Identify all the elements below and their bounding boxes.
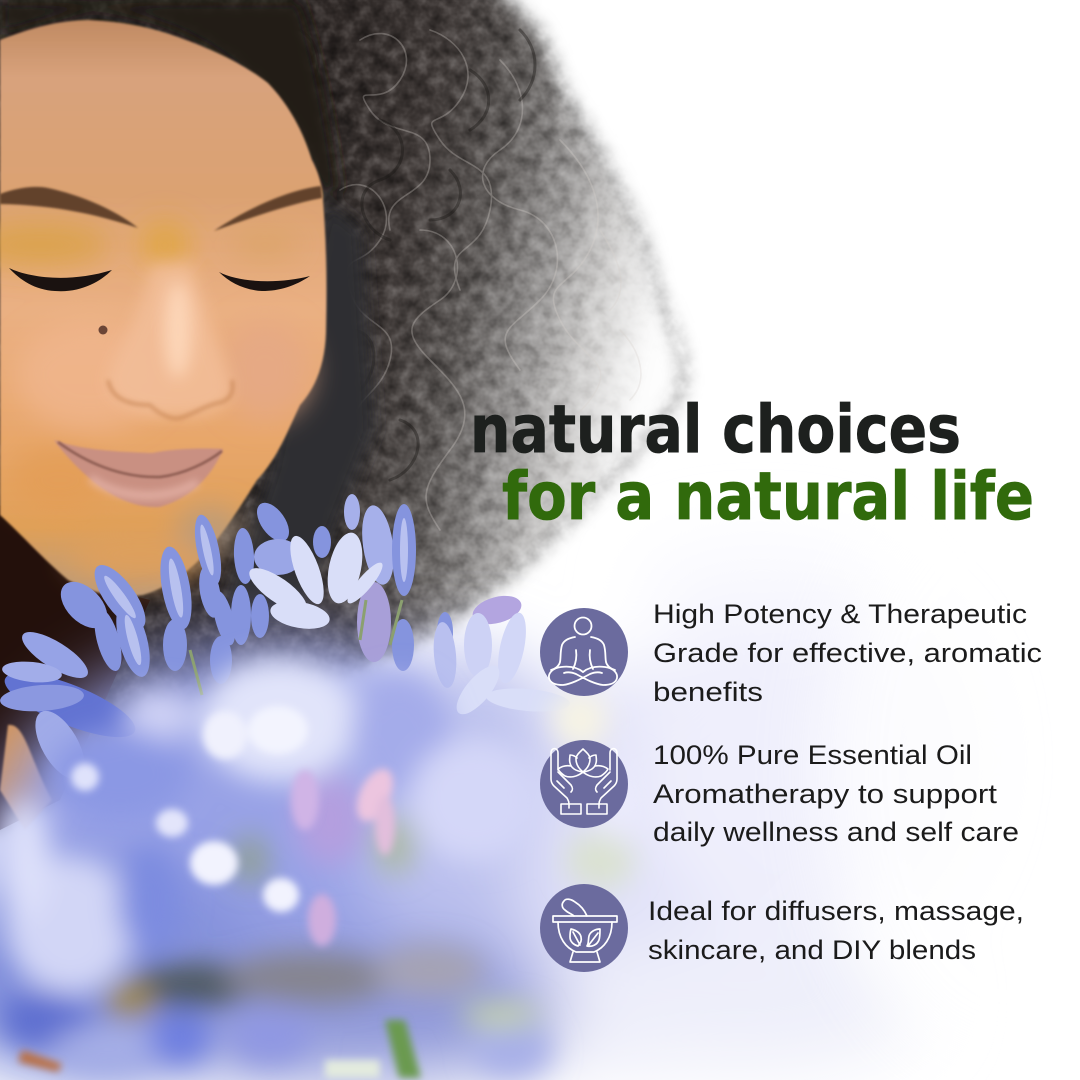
dark hair beside the cheek and top [0, 0, 375, 620]
benefit 3 [540, 884, 1024, 972]
eyebrows [0, 186, 322, 231]
hair [0, 0, 683, 830]
blurred bouquet background [0, 545, 970, 1080]
icon: hands holding lotus [540, 740, 628, 828]
dark hair under the jaw [0, 505, 150, 830]
nose [107, 262, 233, 418]
benefit 3 text: Ideal for diffusers, massage, [648, 896, 1024, 926]
heading line 1: natural choices [470, 391, 961, 468]
heading [470, 391, 1034, 535]
benefit 1 text: benefits [653, 677, 763, 707]
face skin [0, 20, 327, 597]
benefit 3 text [648, 896, 1024, 965]
icon: mortar and pestle with leaves [540, 884, 628, 972]
right side white fade [820, 465, 1080, 1075]
flower stems [190, 600, 402, 695]
skin light and shade [0, 221, 310, 583]
benefit 1 [540, 599, 1042, 707]
smile lips [54, 440, 223, 507]
icon: meditating person [540, 608, 628, 696]
fingers holding flowers [0, 725, 52, 830]
blurred flowers in foreground [0, 658, 650, 1078]
sharp flower petals [0, 494, 571, 787]
benefit 3 text: skincare, and DIY blends [648, 935, 976, 965]
benefit 2 [540, 740, 1019, 847]
benefit 1 text: Grade for effective, aromatic [653, 638, 1042, 668]
benefit 2 text: 100% Pure Essential Oil [653, 740, 972, 770]
benefit 2 text [653, 740, 1019, 847]
benefit 2 text: Aromatherapy to support [653, 779, 998, 809]
benefit 1 text [653, 599, 1042, 707]
closed eyes [9, 268, 310, 291]
benefit 2 text: daily wellness and self care [653, 817, 1019, 847]
benefit 1 text: High Potency & Therapeutic [653, 599, 1027, 629]
beauty mark [98, 326, 108, 334]
